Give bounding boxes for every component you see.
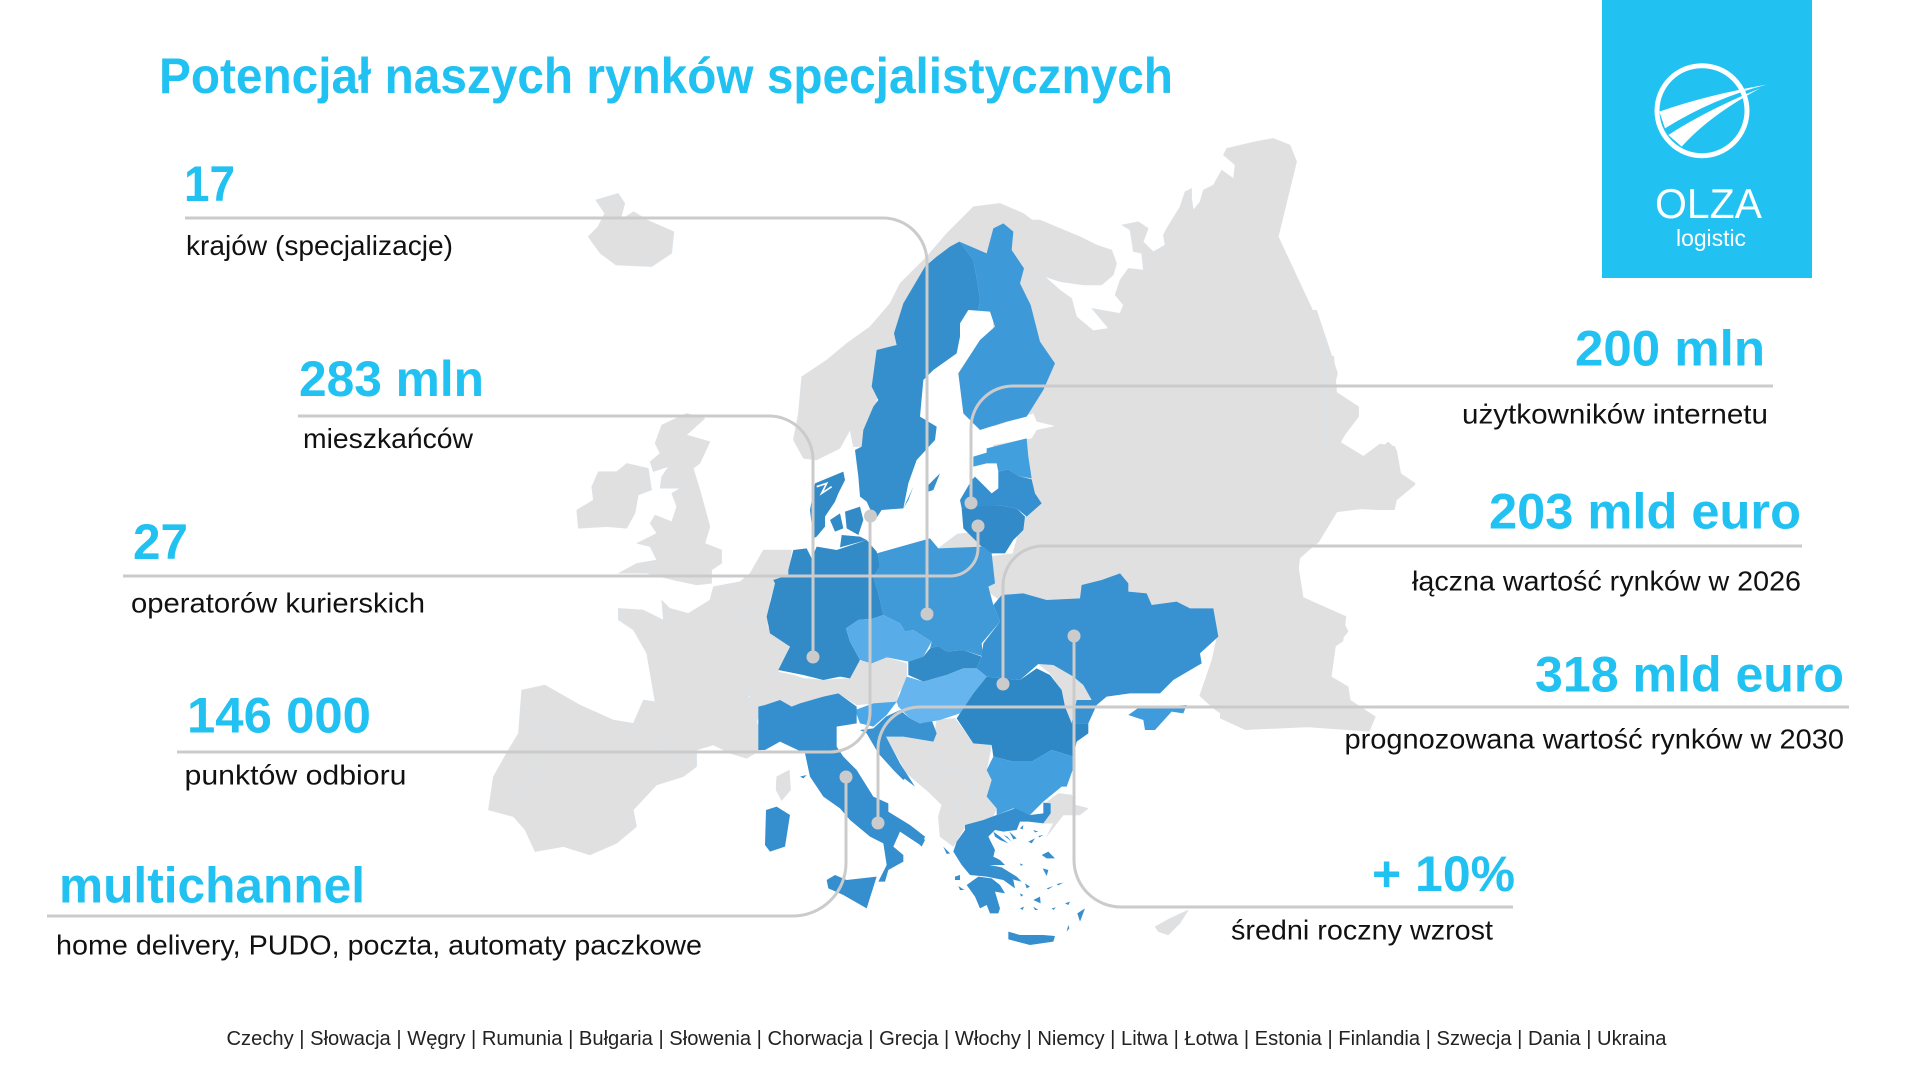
callout: 146 000 pick-up points: punktów odbioru	[184, 760, 406, 790]
callout: 283 mln inhabitants: 283 mln	[299, 351, 484, 407]
callout: 203 mld euro market value 2026: łączna wartość rynków w 2026	[1412, 566, 1801, 596]
footer: list of countries: Czechy | Słowacja | Węgry | Rumunia | Bułgaria | Słowenia | Chorwacja | Grecja | Włochy | Niemcy | Litwa | Łotwa | Estonia | Finlandia | Szwecja | Dania | Ukraina	[226, 1027, 1667, 1050]
sea cut-out: Gulf of Finland	[973, 413, 1055, 447]
Greece and islands	[920, 803, 1085, 945]
callout: 318 mld euro forecast 2030: 318 mld euro	[1535, 646, 1844, 702]
callout: 17 countries: krajów (specjalizacje)	[186, 230, 453, 261]
callout: 283 mln inhabitants: mieszkańców	[303, 423, 474, 454]
callout: 318 mld euro forecast 2030: prognozowana wartość rynków w 2030	[1344, 724, 1844, 754]
callout: +10% annual growth: + 10%	[1372, 846, 1515, 902]
callout: multichannel	[47, 770, 852, 960]
callout: 17 countries: 17	[184, 156, 235, 212]
callout: 318 mld euro forecast 2030	[872, 646, 1849, 830]
callout: 146 000 pick-up points	[177, 510, 877, 790]
callout: 200 mln internet users: 200 mln	[1575, 320, 1765, 376]
callout: 283 mln inhabitants	[298, 351, 820, 664]
callout: 27 courier operators	[123, 514, 984, 618]
callout: 203 mld euro market value 2026	[996, 484, 1802, 690]
callout: 27 courier operators: operatorów kurierskich	[131, 588, 425, 618]
title: Potencjał naszych rynków specjalistycznych	[159, 48, 1173, 104]
logo wordmark: OLZA	[1655, 180, 1762, 227]
callout: 17 countries	[184, 156, 934, 620]
served countries (blue)	[758, 223, 1218, 945]
icon: OLZA globe with swoosh	[1657, 66, 1767, 156]
Denmark	[810, 472, 867, 547]
callout: 200 mln internet users: użytkowników internetu	[1462, 398, 1768, 430]
logo subtitle: logistic	[1676, 225, 1746, 251]
callout: multichannel: multichannel	[59, 858, 365, 914]
countries: south and east	[758, 573, 1218, 908]
callout: 200 mln internet users	[964, 320, 1773, 510]
map of Europe	[488, 138, 1416, 945]
countries: north and central	[767, 223, 1055, 680]
callout: multichannel: home delivery, PUDO, poczta, automaty paczkowe	[56, 930, 702, 960]
callout: 203 mld euro market value 2026: 203 mld euro	[1489, 484, 1801, 540]
callout: +10% annual growth: średni roczny wzrost	[1231, 914, 1493, 946]
callout: 27 courier operators: 27	[133, 514, 188, 570]
callout: 146 000 pick-up points: 146 000	[187, 688, 371, 744]
callout: +10% annual growth	[1068, 630, 1515, 946]
logo panel	[1602, 0, 1812, 278]
non-served countries (grey land)	[488, 138, 1416, 935]
